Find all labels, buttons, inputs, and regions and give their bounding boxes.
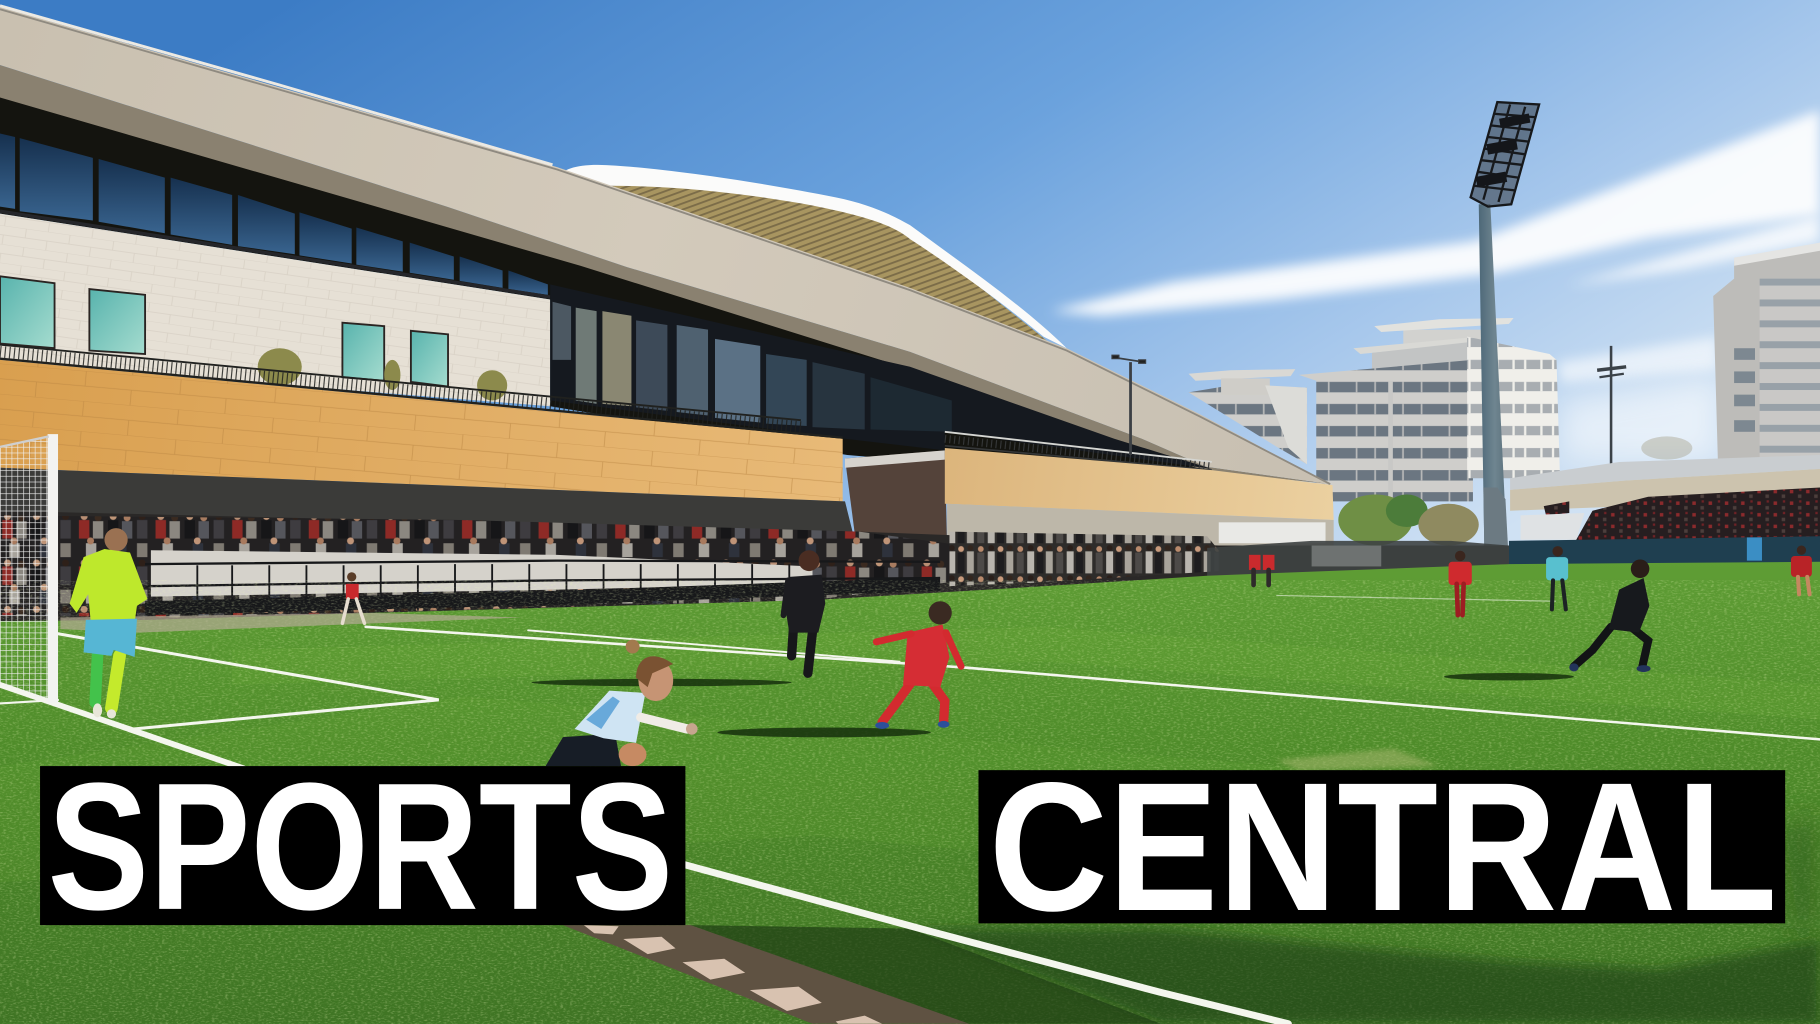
grass mowing bands	[0, 696, 1820, 929]
orange cladding: left	[0, 360, 843, 501]
player: goalkeeper	[70, 528, 147, 718]
floodlight	[1471, 102, 1539, 564]
grass base	[0, 562, 1820, 1024]
left fence	[145, 561, 940, 615]
floodlight head	[1471, 102, 1539, 207]
left benches	[151, 550, 813, 597]
grass texture	[0, 580, 1820, 1024]
stand roof	[1510, 455, 1820, 490]
pitch-side hoarding	[1509, 536, 1820, 566]
label background: CENTRAL	[978, 770, 1785, 923]
brick wall	[0, 214, 550, 406]
paved edge by stand	[60, 613, 522, 633]
pitch markings	[0, 595, 1820, 1024]
players: red pair	[1249, 555, 1274, 585]
goal post	[48, 434, 58, 703]
soffit underside	[0, 65, 1330, 484]
goal	[0, 434, 58, 703]
player shadows	[532, 673, 1574, 737]
roof canopy white edge	[555, 165, 1067, 348]
upper terrace and rail	[945, 432, 1212, 470]
far buildings	[1189, 243, 1820, 546]
ribbon windows	[0, 133, 548, 295]
building: stepped tower	[1299, 318, 1560, 501]
brown column block	[845, 450, 947, 548]
stand back wall	[1510, 469, 1820, 511]
left stand crowd	[0, 515, 963, 618]
lamp post: right	[1597, 346, 1626, 464]
orange cladding: right	[945, 448, 1334, 520]
title block: CENTRAL	[978, 744, 1785, 949]
edging tiles	[584, 925, 882, 1024]
player: edge red one	[1791, 546, 1812, 594]
plants on terrace	[258, 348, 507, 400]
building: right tower	[1713, 243, 1820, 460]
far fence	[1207, 541, 1509, 578]
player: child in red	[875, 601, 961, 729]
player: far blue one	[1546, 546, 1568, 609]
goal net	[0, 436, 48, 701]
label background: SPORTS	[40, 766, 685, 925]
lamp post: left	[1112, 355, 1146, 455]
label text: SPORTS: SPORTS	[48, 746, 673, 948]
trees	[1338, 436, 1692, 546]
sky	[0, 0, 1820, 604]
roof canopy underside	[580, 174, 1050, 344]
right standing crowd	[949, 532, 1219, 586]
ground floor wall	[0, 468, 857, 548]
spectators	[0, 511, 1509, 638]
pitch	[0, 562, 1820, 1024]
building: low tower behind	[1189, 369, 1307, 464]
player: adult in black	[783, 550, 825, 673]
title block: SPORTS	[40, 746, 685, 948]
roof fascia	[0, 7, 1330, 484]
player: runner in black	[1569, 559, 1651, 672]
floodlight pole	[1479, 204, 1508, 564]
player: far red one	[1449, 551, 1472, 615]
player: girl in blue and white	[546, 640, 698, 766]
right stand	[1509, 455, 1820, 566]
stand dark base	[0, 511, 1509, 638]
dirt strip	[563, 925, 969, 1024]
stand crowd	[1576, 488, 1820, 543]
bottom pitch shadow	[910, 929, 1820, 1024]
dark soffit and upper band	[0, 93, 1332, 488]
main building	[0, 6, 1334, 553]
glazed atrium	[550, 284, 1212, 469]
clouds	[1050, 110, 1820, 458]
far players	[342, 546, 1812, 623]
player: small child near stand	[342, 572, 364, 623]
terrace railing	[0, 345, 843, 438]
teal windows	[0, 276, 448, 387]
stand white wall	[1521, 513, 1584, 540]
